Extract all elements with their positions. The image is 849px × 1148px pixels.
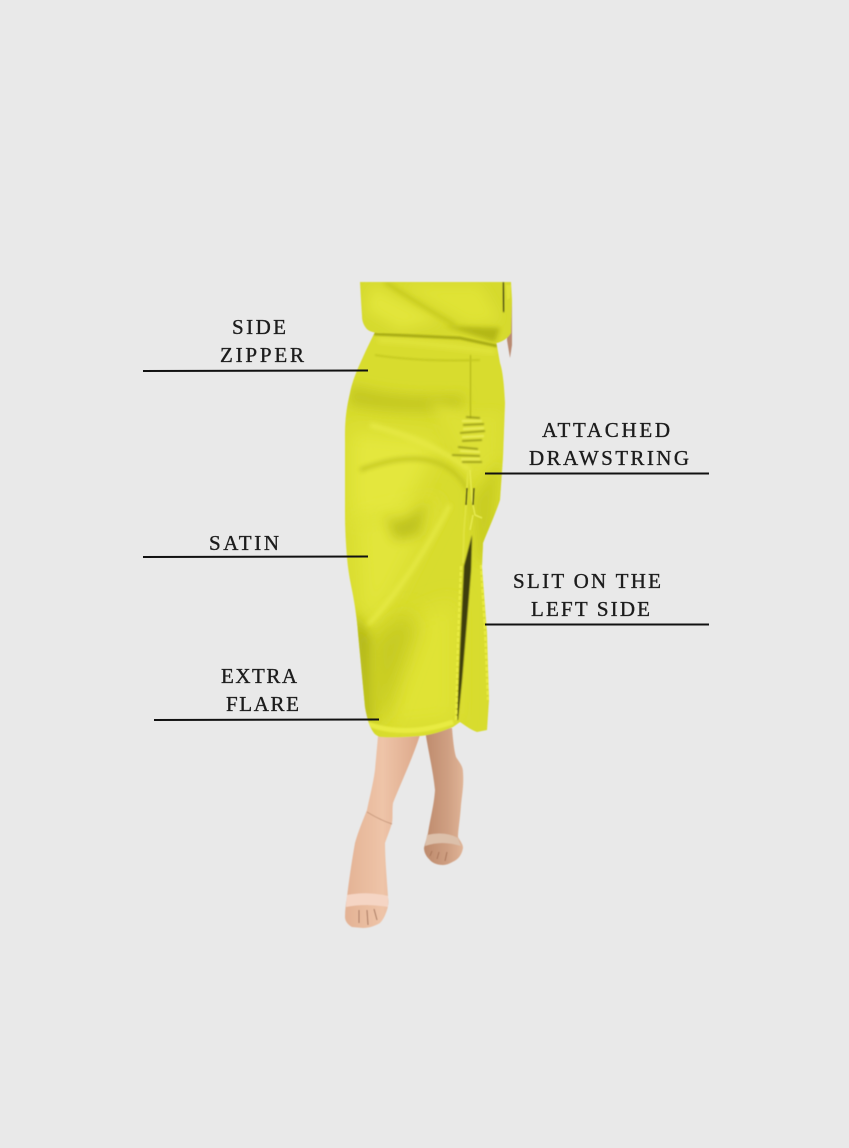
hem bbox=[368, 722, 453, 731]
label text bbox=[513, 569, 661, 621]
label text: DRAWSTRING bbox=[529, 446, 689, 470]
label text: LEFT SIDE bbox=[531, 597, 650, 621]
label text bbox=[220, 315, 304, 367]
front leg and foot bbox=[345, 735, 420, 928]
label text: ZIPPER bbox=[220, 343, 304, 367]
label text: FLARE bbox=[226, 692, 299, 716]
label: slit on the left side bbox=[485, 569, 709, 624]
slit opening bbox=[457, 535, 472, 720]
drawstring bbox=[463, 470, 482, 563]
label text: SATIN bbox=[209, 531, 279, 555]
label text: SLIT ON THE bbox=[513, 569, 661, 593]
satin sheen and folds bbox=[348, 334, 500, 728]
top bbox=[360, 282, 512, 343]
leader line bbox=[154, 718, 379, 721]
skirt bbox=[345, 330, 505, 737]
leader line bbox=[143, 370, 368, 372]
label text: SIDE bbox=[232, 315, 286, 339]
ruched seam bbox=[452, 355, 485, 462]
label text bbox=[221, 664, 299, 716]
label: attached drawstring bbox=[485, 418, 709, 474]
label text bbox=[529, 418, 689, 470]
top folds bbox=[366, 282, 511, 342]
label: side zipper bbox=[143, 315, 368, 371]
label text: ATTACHED bbox=[542, 418, 670, 442]
back leg and foot bbox=[424, 728, 463, 865]
leader line bbox=[485, 624, 709, 626]
model wearing skirt bbox=[345, 282, 512, 928]
label text: EXTRA bbox=[221, 664, 298, 688]
leader line bbox=[143, 556, 368, 558]
arm sliver bbox=[507, 298, 512, 358]
infographic canvas bbox=[143, 281, 709, 928]
label: extra flare bbox=[154, 664, 379, 720]
slit edges bbox=[456, 565, 488, 720]
leader line bbox=[485, 472, 709, 474]
